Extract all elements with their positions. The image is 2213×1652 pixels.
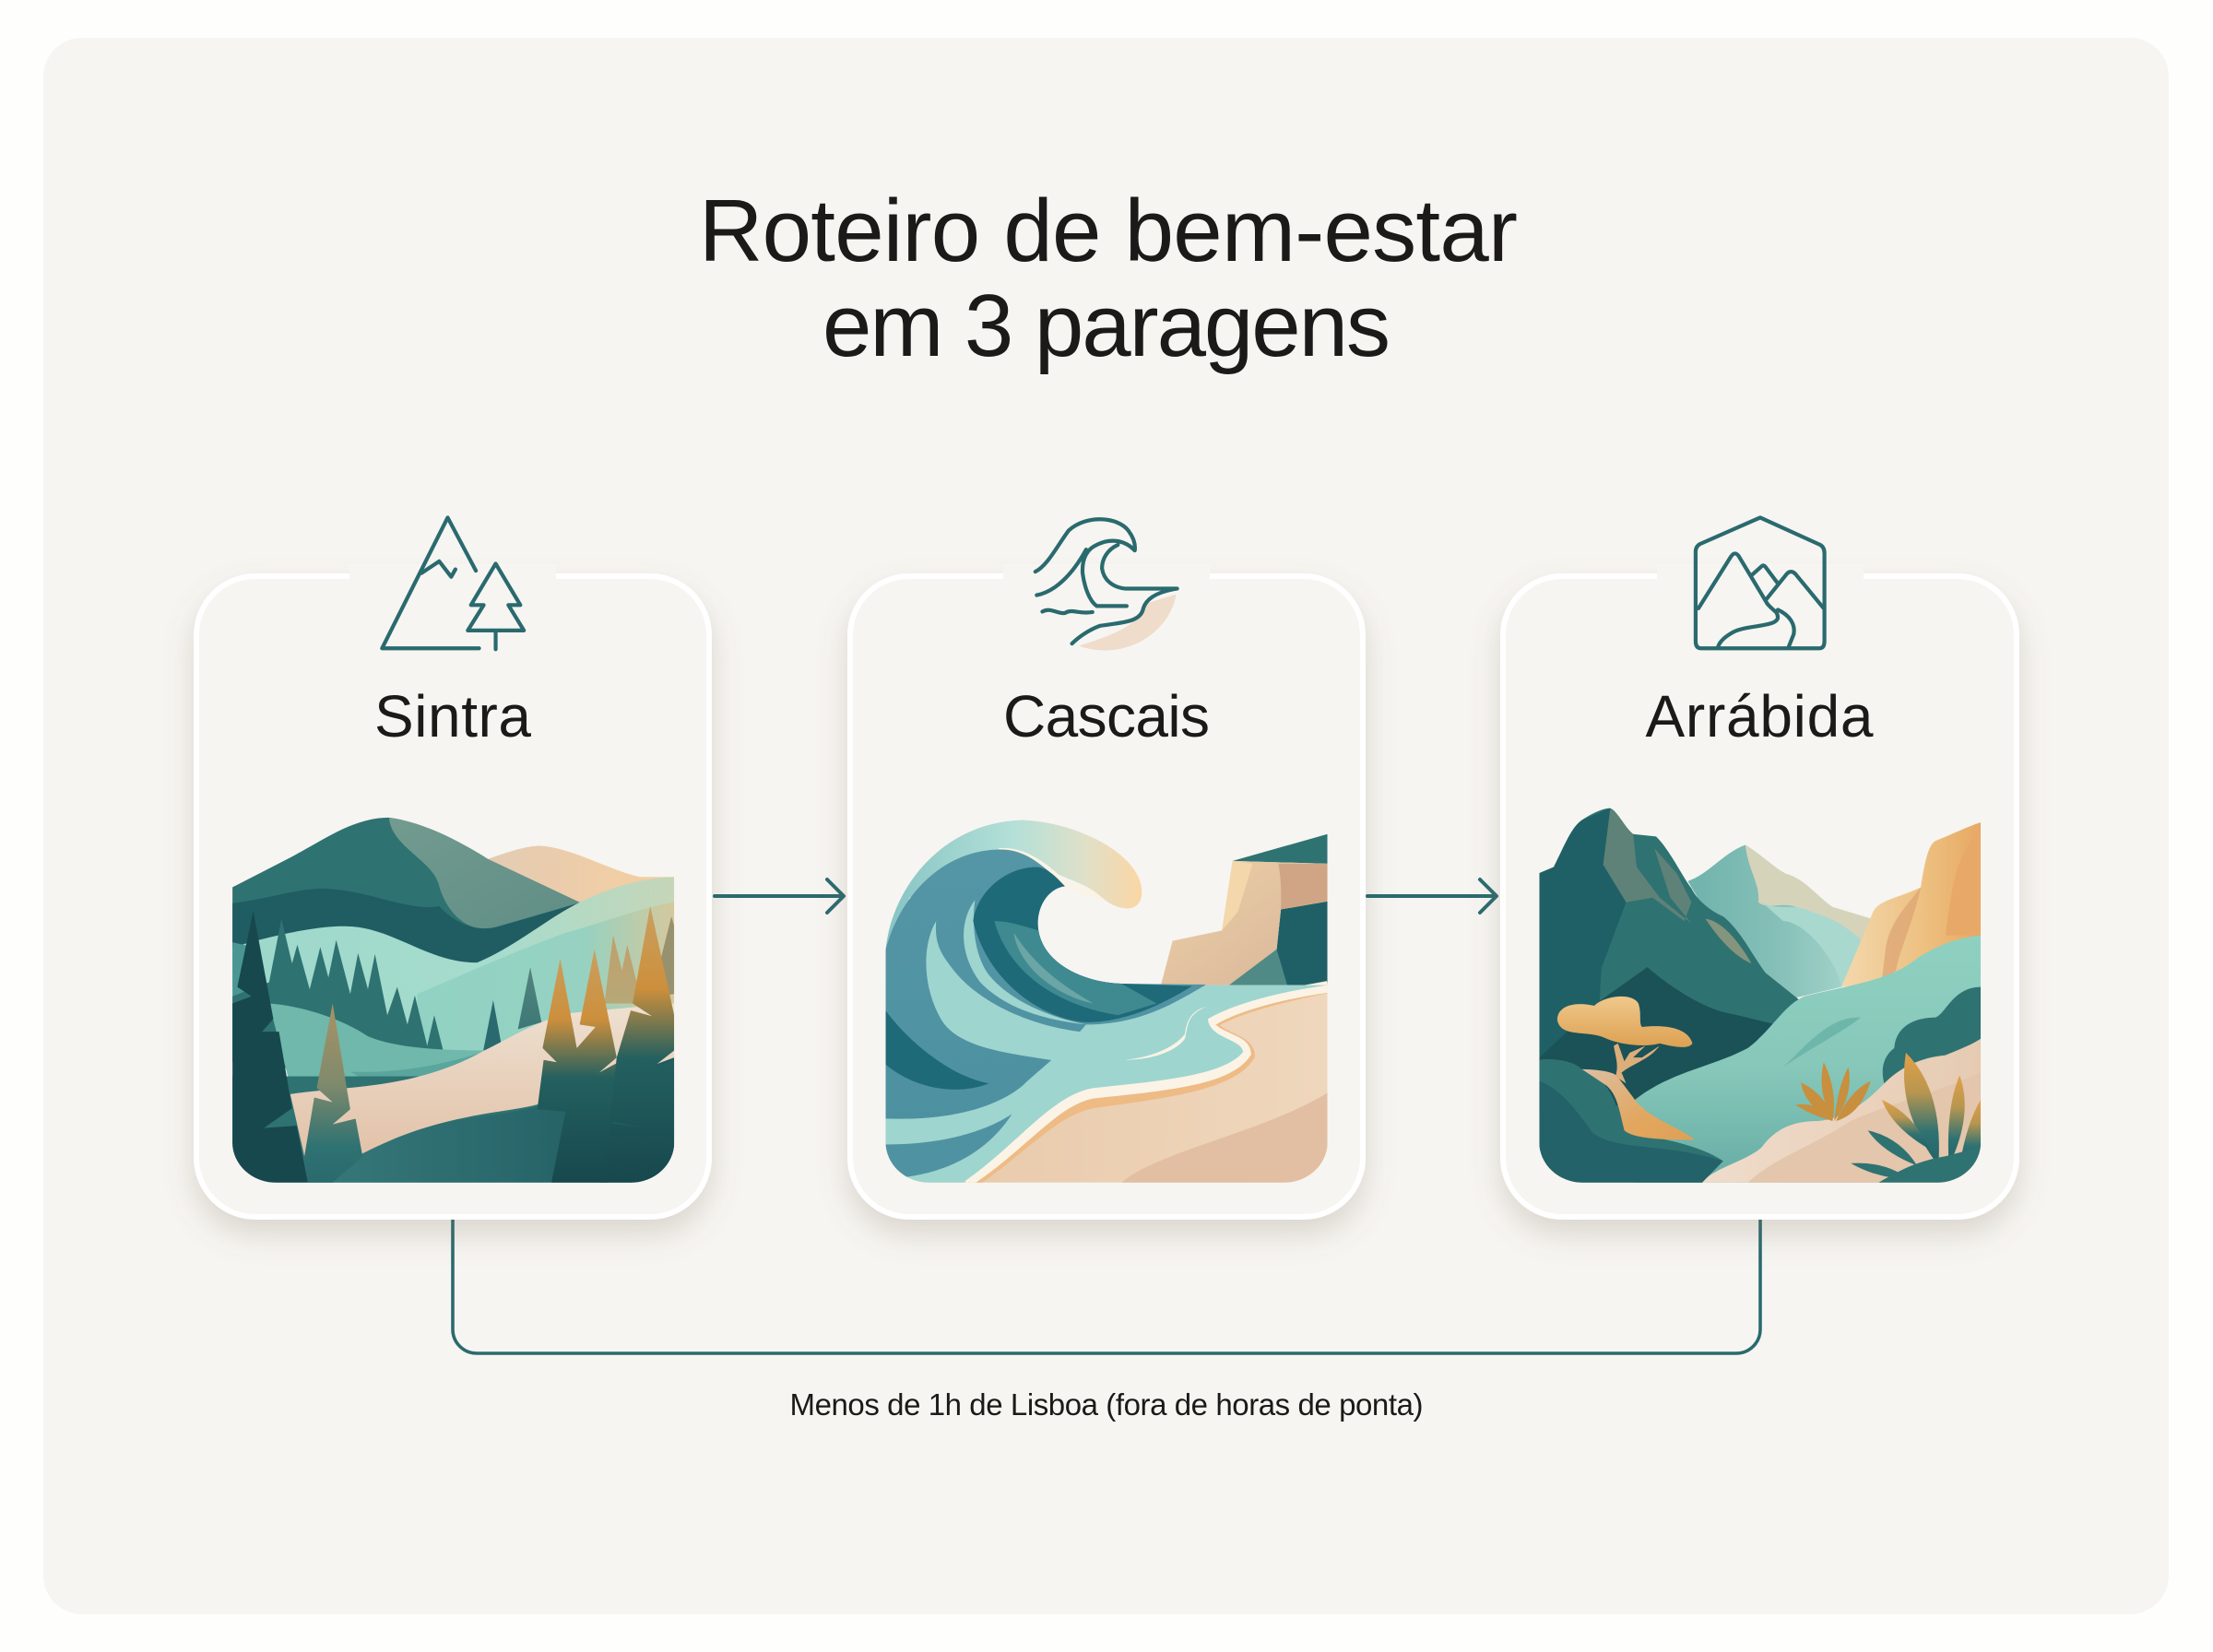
panel: Sintra card [196, 517, 709, 1217]
icon: wave and shore [1035, 519, 1178, 650]
title: em 3 paragens [822, 277, 1391, 375]
label: Sintra: Sintra [374, 683, 531, 749]
icon: mountain and pine [382, 517, 524, 649]
panel: Arrábida card [1503, 517, 2017, 1217]
panel: Cascais card [850, 519, 1363, 1217]
illustration: Sintra forest hills [232, 818, 674, 1183]
bracket connector: Sintra to Arrábida [453, 1220, 1760, 1353]
title: Roteiro de bem-estar [699, 182, 1518, 280]
icon: framed mountains and river [1696, 517, 1825, 648]
illustration: Arrábida mountains and river [1539, 808, 1981, 1183]
illustration: Cascais wave and beach [886, 820, 1328, 1185]
arrow: Sintra to Cascais [715, 879, 844, 913]
title [699, 182, 1518, 375]
label: Arrábida: Arrábida [1645, 683, 1874, 749]
arrow: Cascais to Arrábida [1367, 879, 1497, 913]
caption: Menos de 1h de Lisboa (fora de horas de ponta) [789, 1387, 1424, 1422]
label: Cascais: Cascais [1003, 683, 1210, 749]
